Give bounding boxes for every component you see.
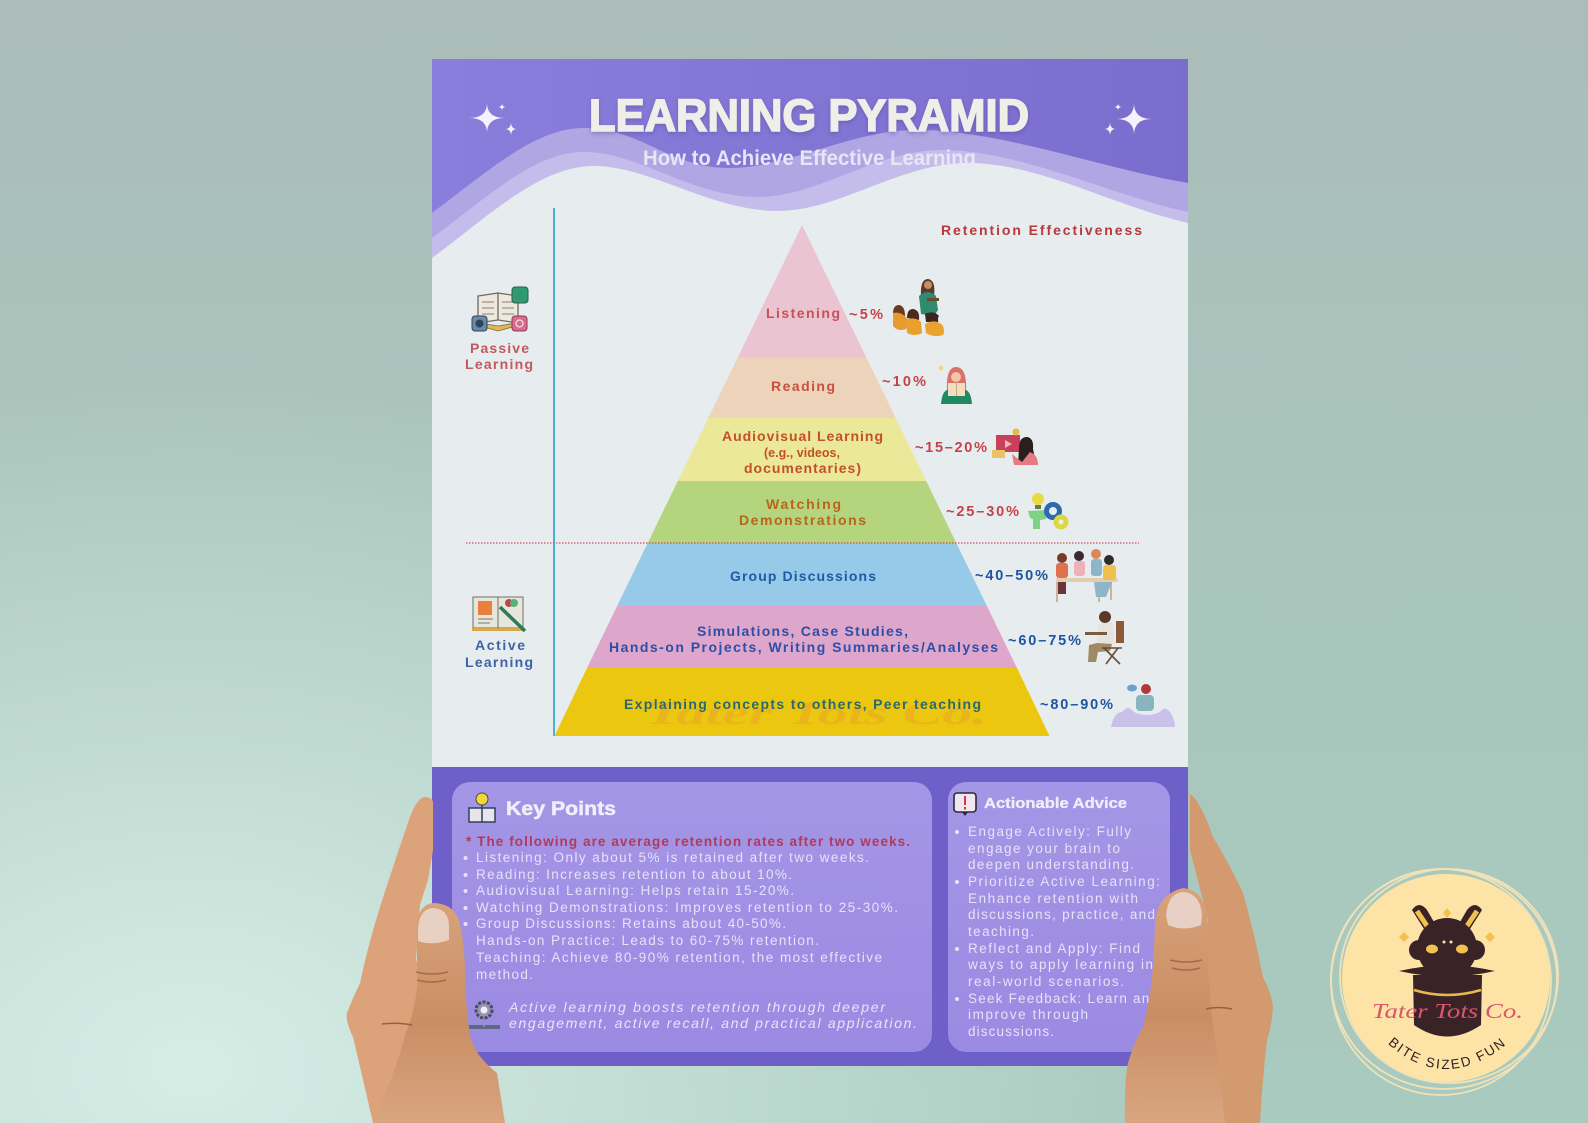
poster — [432, 59, 1188, 1066]
retention percentages — [849, 307, 1113, 713]
icon: student at desk — [1085, 611, 1124, 664]
label: passive learning — [465, 340, 533, 372]
italic takeaway: engagement, active recall, and practical application. — [509, 1015, 917, 1031]
icon: notebook with pen — [472, 597, 525, 631]
note: red retention line: * The following are average retention rates after two weeks. — [466, 834, 910, 849]
axis line — [553, 208, 555, 736]
key points bullet list: Teaching: Achieve 80-90% retention, the most effective — [476, 950, 882, 965]
title: LEARNING PYRAMID — [589, 90, 1029, 141]
heading: actionable advice: Actionable Advice — [984, 796, 1127, 812]
tagline: BITE SIZED FUN — [1388, 1037, 1505, 1069]
pyramid — [554, 225, 1050, 736]
header waves — [432, 59, 1188, 258]
label: watching: Watching — [766, 496, 841, 512]
label: passive learning: Learning — [465, 356, 533, 372]
advice bullet list: discussions, practice, and — [968, 907, 1155, 922]
badge circle and rings — [1331, 869, 1558, 1095]
active learning group — [465, 597, 533, 670]
value 80-90: ~80–90% — [1040, 697, 1113, 713]
advice bullet list: Seek Feedback: Learn and — [968, 991, 1158, 1006]
right hand — [1125, 794, 1273, 1123]
label: watching — [739, 496, 866, 528]
icon: speaker with audience — [1111, 684, 1175, 727]
italic takeaway: Active learning boosts retention through deeper — [508, 999, 886, 1015]
value 40-50: ~40–50% — [975, 568, 1048, 584]
panel: actionable advice — [948, 782, 1170, 1052]
tier: reading — [708, 358, 896, 418]
advice bullet list: deepen understanding. — [968, 857, 1134, 872]
watermark: Tater Tots Co. — [645, 696, 987, 732]
sparkles right — [1104, 103, 1152, 136]
label: audiovisual: documentaries) — [744, 460, 861, 476]
key points bullet list: method. — [476, 967, 533, 982]
bunny in hat — [1399, 905, 1495, 1036]
advice bullet list: Enhance retention with — [968, 891, 1138, 906]
key points bullet list: Listening: Only about 5% is retained after two weeks. — [476, 850, 869, 865]
icon: reader — [938, 366, 972, 404]
key points bullet list: Watching Demonstrations: Improves retention to 25-30%. — [476, 900, 898, 915]
label: audiovisual: Audiovisual Learning — [722, 428, 883, 444]
icon: alert bubble — [954, 793, 976, 816]
tier: demonstrations — [648, 481, 956, 543]
bottom panel — [432, 767, 1188, 1066]
left hand — [347, 797, 505, 1123]
tier: group discussions — [617, 543, 987, 606]
key points bullet list — [464, 850, 898, 982]
label: reading: Reading — [771, 378, 835, 394]
icon: book and bulb — [469, 793, 495, 822]
advice bullet list: Reflect and Apply: Find — [968, 941, 1140, 956]
retention heading: Retention Effectiveness — [941, 222, 1142, 238]
label: simulations — [609, 623, 998, 655]
value 10: ~10% — [882, 374, 926, 390]
tier: teaching — [554, 668, 1050, 736]
passive learning group — [465, 287, 533, 372]
label: teaching: Explaining concepts to others, Peer teaching — [624, 696, 981, 712]
key points bullet list: Hands-on Practice: Leads to 60-75% retention. — [476, 933, 819, 948]
tier: listening — [738, 225, 866, 358]
label: active learning — [465, 637, 533, 670]
advice bullet list: teaching. — [968, 924, 1034, 939]
value 5: ~5% — [849, 307, 883, 323]
label: group: Group Discussions — [730, 568, 876, 584]
advice bullet list: discussions. — [968, 1024, 1054, 1039]
key points bullet list: Reading: Increases retention to about 10%. — [476, 867, 792, 882]
pyramid labels — [609, 305, 998, 712]
label: audiovisual: (e.g., videos, — [764, 446, 840, 460]
icon: listening group — [893, 279, 944, 336]
italic takeaway — [508, 999, 917, 1031]
subtitle: How to Achieve Effective Learning — [643, 147, 976, 170]
label: simulations: Simulations, Case Studies, — [697, 623, 908, 639]
advice bullet list — [955, 824, 1160, 1039]
advice bullet list: real-world scenarios. — [968, 974, 1124, 989]
icon: group table — [1056, 549, 1118, 602]
heading: key points: Key Points — [506, 799, 616, 820]
brand name: Tater Tots Co. — [1372, 999, 1523, 1023]
value 25-30: ~25–30% — [946, 504, 1019, 520]
panel: key points — [452, 782, 932, 1052]
key points bullet list: Group Discussions: Retains about 40-50%. — [476, 916, 786, 931]
label: passive learning: Passive — [470, 340, 529, 356]
tier: audiovisual — [678, 418, 926, 481]
advice bullet list: Prioritize Active Learning: — [968, 874, 1160, 889]
icon: open book with media — [472, 287, 528, 331]
tier: simulations — [587, 606, 1017, 668]
poster white body — [432, 59, 1188, 1066]
label: simulations: Hands-on Projects, Writing Summaries/Analyses — [609, 639, 998, 655]
advice bullet list: ways to apply learning in — [967, 957, 1153, 972]
label: audiovisual — [722, 428, 883, 476]
icon: demonstrations gears — [1028, 493, 1066, 529]
label: watching: Demonstrations — [739, 512, 866, 528]
advice bullet list: engage your brain to — [968, 841, 1120, 856]
sparkles left — [469, 103, 517, 136]
value 60-75: ~60–75% — [1008, 633, 1081, 649]
key points bullet list: Audiovisual Learning: Helps retain 15-20%. — [476, 883, 794, 898]
label: active learning: Active — [475, 637, 525, 653]
icon: audiovisual — [992, 428, 1038, 465]
logo: Tater Tots Co. badge — [1330, 868, 1559, 1096]
icon: gear over book — [469, 1002, 500, 1029]
value 15-20: ~15–20% — [915, 440, 987, 456]
divider between passive and active — [466, 542, 1139, 544]
label: listening: Listening — [766, 305, 840, 321]
advice bullet list: improve through — [968, 1007, 1088, 1022]
advice bullet list: Engage Actively: Fully — [968, 824, 1131, 839]
label: active learning: Learning — [465, 654, 533, 670]
